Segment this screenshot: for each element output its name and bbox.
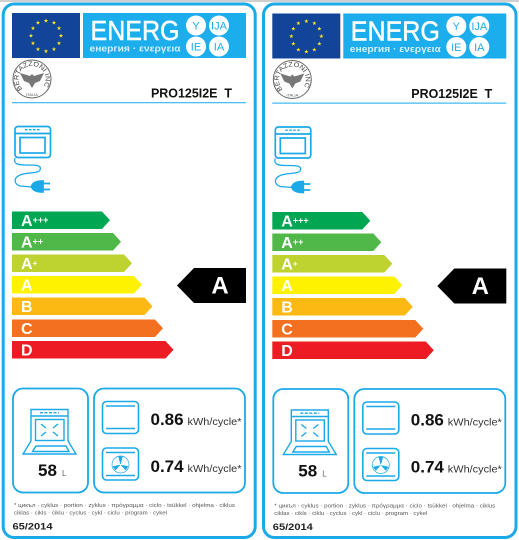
EU flag: ★ [44, 49, 49, 55]
bar A+: + [293, 260, 298, 268]
regulation number: 65/2014 [273, 522, 313, 532]
energy banner [83, 13, 246, 58]
panel: energy consumption: kWh/cycle* [448, 418, 502, 428]
heading: ENERG: ENERG [351, 16, 440, 46]
bar A [12, 276, 142, 294]
EU flag: ★ [36, 20, 41, 26]
EU flag: ★ [291, 42, 296, 48]
bar A [272, 276, 402, 295]
language circles: IE [191, 42, 201, 54]
language circles: IA [214, 42, 225, 54]
subheading: енергия · ενεργεια [90, 44, 181, 54]
label border [3, 4, 255, 538]
language circles: IJA [211, 20, 228, 32]
bar A+++: +++ [33, 215, 48, 225]
energy banner [343, 14, 506, 58]
EU flag: ★ [57, 26, 62, 32]
model name: PRO125I2E T [151, 86, 232, 101]
icon: forced air fan [102, 448, 138, 480]
icon: conventional heating [363, 402, 399, 434]
EU flag: ★ [319, 34, 324, 40]
bar A+++ [12, 212, 110, 230]
rating arrow: A [177, 268, 246, 303]
footnote [14, 502, 235, 516]
language circles: IJA [471, 21, 488, 33]
panel: energy consumption: kWh/cycle* [448, 464, 502, 476]
bar A+: A [21, 256, 33, 273]
bar A+ [272, 255, 392, 274]
panel: energy consumption: kWh/cycle* [188, 464, 242, 475]
brand logo: BERTAZZONI INC [14, 61, 50, 92]
conventional value: 0.86 [411, 410, 444, 430]
EU flag: ★ [296, 21, 301, 27]
icon: oven cavity [283, 410, 336, 454]
model name: PRO125I2E T [411, 86, 492, 101]
bar D [12, 341, 174, 360]
bar A: A [21, 278, 33, 294]
panel: energy consumption [354, 389, 505, 493]
regulation number: 65/2014 [12, 522, 52, 532]
language circles [446, 16, 489, 57]
bar A++: ++ [293, 237, 303, 247]
bar A+: A [281, 256, 293, 274]
bar B [12, 298, 152, 316]
panel: oven volume [273, 389, 348, 493]
EU flag: ★ [296, 48, 301, 54]
bar D: D [281, 343, 293, 360]
EU flag: ★ [289, 34, 294, 40]
footnote: * цикъл · cyklus · portion · zyklus · πρόγραμμα · ciclo · tsükkel · ohjelma · ciklus [14, 502, 235, 509]
bar A++ [272, 234, 381, 252]
EU flag: ★ [59, 34, 64, 40]
bar A+++: A [21, 213, 33, 230]
bar A++ [12, 233, 121, 252]
brand logo: BERTAZZONI INC [274, 62, 310, 92]
language circles: Y [453, 21, 461, 33]
language circles: IA [474, 42, 485, 54]
energy scale [272, 212, 434, 360]
EU flag: ★ [52, 47, 57, 53]
icon: forced air fan [363, 448, 399, 480]
bar D: D [21, 342, 33, 360]
EU flag [12, 13, 80, 58]
brand logo: ITALIA [26, 92, 38, 97]
bar A: A [281, 278, 293, 295]
subheading: енергия · ενεργεια [350, 44, 441, 55]
icon: electric oven with plug [275, 127, 311, 192]
brand logo: ITALIA [286, 92, 299, 98]
EU flag: ★ [291, 26, 296, 32]
footnote [274, 502, 496, 517]
EU flag: ★ [312, 48, 317, 54]
bar A+++: A [281, 214, 293, 230]
bar A++: A [21, 234, 33, 252]
bar A++: A [281, 235, 293, 252]
EU flag: ★ [44, 18, 49, 24]
panel: oven volume [13, 388, 88, 492]
EU flag: ★ [36, 47, 41, 53]
bar A+++ [272, 212, 370, 230]
conventional value: 0.86 [150, 410, 184, 429]
footnote: * цикъл · cyklus · portion · zyklus · πρόγραμμα · ciclo · tsükkel · ohjelma · ciklus [274, 502, 496, 510]
icon: conventional heating [102, 402, 138, 434]
energy scale [12, 212, 174, 360]
language circles: Y [192, 20, 200, 32]
footnote: ciklas · cikls · ċiklu · cyclus · cykl · ciclu · program · cykel [14, 510, 167, 516]
EU flag: ★ [52, 20, 57, 26]
language circles: IE [451, 42, 462, 54]
bar D [272, 342, 434, 360]
EU flag [272, 14, 340, 58]
bar C: C [281, 322, 293, 338]
EU flag: ★ [29, 34, 34, 40]
bar B [272, 298, 413, 316]
icon: electric oven with plug [15, 126, 50, 192]
EU flag: ★ [31, 26, 36, 32]
volume value: 58 [298, 462, 317, 480]
fan value: 0.74 [411, 458, 444, 476]
bar A+ [12, 254, 132, 273]
bar A+++: +++ [293, 216, 309, 226]
panel: left energy label [2, 2, 257, 539]
rating arrow: A: A [211, 272, 229, 300]
fan value: 0.74 [150, 457, 184, 476]
bar B: B [21, 299, 33, 316]
EU flag: ★ [57, 41, 62, 47]
label border [264, 4, 516, 538]
panel: energy consumption [94, 388, 245, 492]
EU flag: ★ [304, 50, 309, 56]
panel: oven volume: L [62, 469, 67, 478]
bar A+: + [33, 259, 38, 268]
bar C: C [21, 321, 33, 338]
bar A++: ++ [33, 236, 43, 246]
EU flag: ★ [317, 26, 322, 32]
bar C [272, 320, 423, 338]
bar B: B [281, 300, 293, 316]
rating arrow: A [437, 268, 506, 304]
volume value: 58 [38, 461, 57, 480]
EU flag: ★ [304, 19, 309, 25]
rating arrow: A: A [472, 273, 489, 300]
panel: oven volume: L [322, 470, 327, 478]
heading: ENERG: ENERG [90, 15, 180, 46]
EU flag: ★ [317, 42, 322, 48]
panel: right energy label [262, 2, 518, 539]
bar C [12, 320, 163, 338]
language circles [186, 16, 229, 56]
EU flag: ★ [31, 41, 36, 47]
panel: energy consumption: kWh/cycle* [188, 417, 242, 428]
icon: oven cavity [23, 410, 76, 454]
EU flag: ★ [312, 21, 317, 27]
footnote: ciklas · cikls · ċiklu · cyclus · cykl · ciclu · program · cykel [274, 511, 427, 517]
